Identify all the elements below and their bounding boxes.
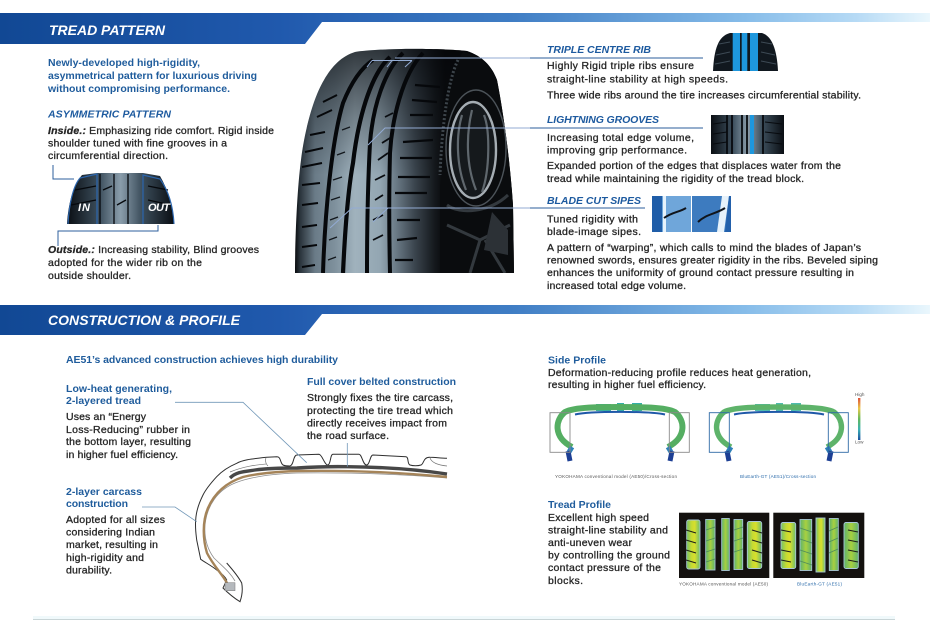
icon: triple rib tire <box>713 33 778 71</box>
text: straight-line stability at high speeds. <box>547 74 728 86</box>
caption: conventional cross-section: YOKOHAMA conventional model (AE50)/Cross-section <box>555 474 677 479</box>
section header: tread pattern <box>0 13 930 44</box>
text <box>548 512 670 587</box>
text block: low-heat tread <box>66 383 191 461</box>
text block: inside: circumferential direction. <box>48 150 168 162</box>
text: increased total edge volume. <box>547 280 686 292</box>
tire cross-section diagram <box>195 454 447 602</box>
text block: tread pattern intro: Newly-developed high-rigidity, <box>48 57 200 69</box>
text block: inside: shoulder tuned with fine grooves in a <box>48 138 227 150</box>
text block: full cover belted: protecting the tire tread which <box>307 405 453 417</box>
text: by controlling the ground <box>548 550 670 562</box>
text: blade-image sipes. <box>547 226 641 238</box>
text: Highly Rigid triple ribs ensure <box>547 60 694 72</box>
leader: inside <box>53 165 74 179</box>
panel: blade cut sipes <box>547 195 878 292</box>
panel: triple centre rib <box>547 33 861 102</box>
text block: carcass: considering Indian <box>66 526 155 538</box>
text: tread while maintaining the rigidity of the tread block. <box>547 173 804 185</box>
icon: blade sipes <box>652 196 731 232</box>
text block: outside: adopted for the wider rib on the <box>48 257 202 269</box>
text: A pattern of “warping”, which calls to mind the blades of Japan’s <box>547 242 861 254</box>
caption: bluearth cross-section: BluEarth-GT (AE51)/Cross-section <box>740 474 816 479</box>
section header: construction and profile <box>0 305 930 335</box>
text block: full cover belted <box>307 376 456 442</box>
leader: blade cut sipes <box>530 207 645 209</box>
panel: lightning grooves <box>547 114 841 185</box>
legend: heat scale: High <box>855 392 865 397</box>
text <box>547 214 878 292</box>
chart: bluearth tread pressure <box>773 513 864 578</box>
heading: tread pattern: TREAD PATTERN <box>49 22 166 38</box>
heading: Side Profile <box>548 354 606 366</box>
heading: BLADE CUT SIPES <box>547 195 641 207</box>
leader: belted construction <box>346 443 348 467</box>
text: blocks. <box>548 575 583 587</box>
icon: lightning groove tire <box>711 115 784 154</box>
text block: low-heat tread: Uses an “Energy <box>66 411 147 423</box>
text block: tread pattern intro: without compromising performance. <box>47 83 230 95</box>
text: anti-uneven wear <box>548 537 632 549</box>
text block: carcass: market, resulting in <box>66 539 158 551</box>
text block: outside: Outside.: Increasing stability, Blind grooves <box>48 244 259 256</box>
text block: inside <box>48 125 274 162</box>
heading: Tread Profile <box>548 499 611 511</box>
text block: carcass: 2-layer carcass <box>66 486 142 498</box>
leader: carcass <box>142 507 197 522</box>
leader: tread <box>175 402 307 463</box>
heading: LIGHTNING GROOVES <box>547 114 659 126</box>
text block: full cover belted: Strongly fixes the tire carcass, <box>307 392 453 404</box>
text <box>548 367 811 391</box>
heading: construction and profile: CONSTRUCTION & PROFILE <box>48 312 241 328</box>
text: resulting in higher fuel efficiency. <box>548 379 706 391</box>
text: Excellent high speed <box>548 512 649 524</box>
text: improving grip performance. <box>547 144 687 156</box>
text <box>547 60 861 102</box>
text block: outside <box>48 244 259 282</box>
text block: low-heat tread: in higher fuel efficiency. <box>66 449 178 461</box>
heading: TRIPLE CENTRE RIB <box>547 44 651 56</box>
leader: triple centre rib <box>530 57 703 59</box>
text: straight-line stability and <box>548 524 668 536</box>
panel: side profile text <box>548 354 811 391</box>
text: contact pressure of the <box>548 562 661 574</box>
panel: tread profile text <box>548 499 670 587</box>
text: Three wide ribs around the tire increases circumferential stability. <box>547 90 861 102</box>
chart: conventional cross-section <box>550 403 689 461</box>
leader lines over tire <box>330 58 540 228</box>
text block: carcass: durability. <box>66 564 112 576</box>
chart: bluearth cross-section <box>709 403 848 461</box>
text block: inside: Inside.: Emphasizing ride comfort. Rigid inside <box>48 125 274 137</box>
main tire image <box>290 45 520 275</box>
text block: low-heat tread: Low-heat generating, <box>66 383 172 395</box>
leader: lightning grooves <box>530 127 703 129</box>
text <box>547 132 841 185</box>
text block: carcass: high-rigidity and <box>66 552 144 564</box>
icon: in and out tread thumbnail <box>67 173 174 224</box>
subheading: advanced construction: AE51’s advanced construction achieves high durability <box>66 354 338 366</box>
text: Increasing total edge volume, <box>547 132 694 144</box>
text block: carcass <box>66 486 165 576</box>
heading: asymmetric pattern: ASYMMETRIC PATTERN <box>47 108 171 120</box>
text block: full cover belted: the road surface. <box>307 430 389 442</box>
text block: low-heat tread: 2-layered tread <box>66 395 141 407</box>
label: in: IN <box>78 202 91 214</box>
text block: low-heat tread: the bottom layer, resulting <box>66 436 191 448</box>
text block: carcass: Adopted for all sizes <box>66 514 165 526</box>
chart: conventional tread pressure <box>679 513 769 578</box>
text block: full cover belted: Full cover belted construction <box>307 376 456 388</box>
text: Deformation-reducing profile reduces heat generation, <box>548 367 811 379</box>
legend: heat scale <box>855 392 865 444</box>
text block: low-heat tread: Loss-Reducing” rubber in <box>66 424 190 436</box>
text block: full cover belted: directly receives impact from <box>307 418 447 430</box>
text: Expanded portion of the edges that displaces water from the <box>547 160 841 172</box>
text: Tuned rigidity with <box>547 214 638 226</box>
leader: outside <box>58 225 158 246</box>
text block: carcass: construction <box>66 498 128 510</box>
legend: heat scale: Low <box>855 440 864 444</box>
text: enhances the uniformity of ground contact pressure resulting in <box>547 267 854 279</box>
caption: bluearth tread pressure: BluEarth-GT (AE51) <box>797 582 842 586</box>
text block: tread pattern intro: asymmetrical pattern for luxurious driving <box>48 70 257 82</box>
text block: outside: outside shoulder. <box>48 270 131 282</box>
caption: conventional tread pressure: YOKOHAMA conventional model (AE50) <box>679 582 768 586</box>
text block: tread pattern intro <box>47 57 257 95</box>
label: out: OUT <box>148 202 171 214</box>
text: renowned swords, ensures greater rigidity in the ribs. Beveled siping <box>547 254 878 266</box>
